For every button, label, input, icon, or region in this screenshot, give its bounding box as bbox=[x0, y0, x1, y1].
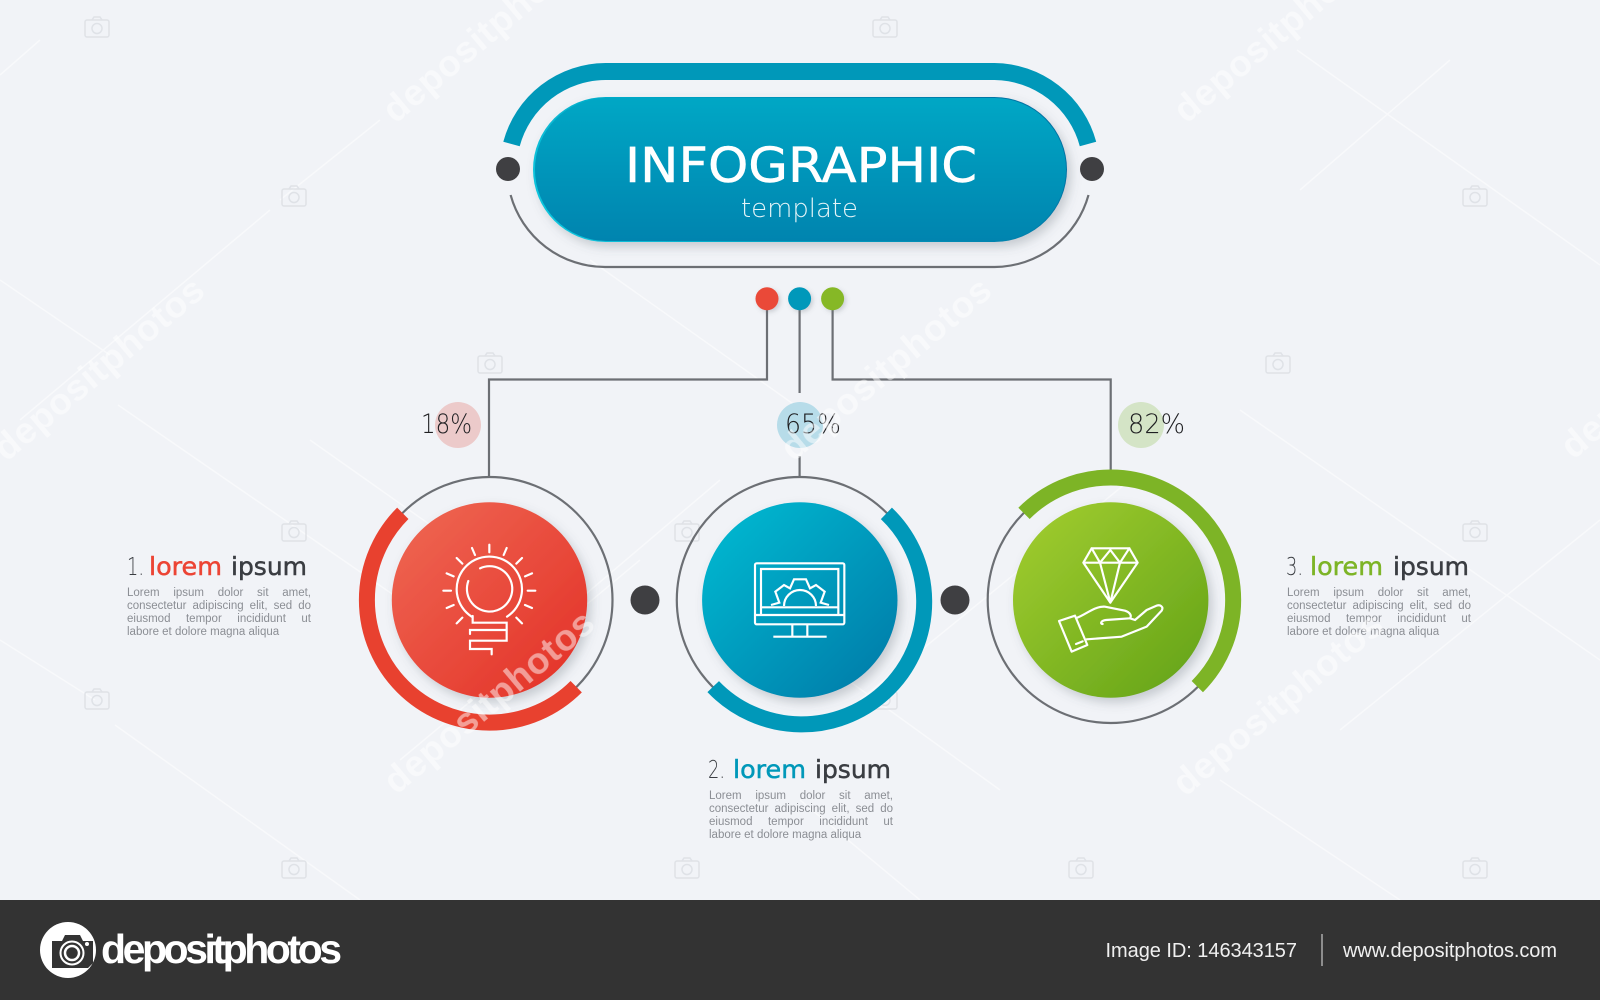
body 1: consectetur adipiscing elit, sed do bbox=[127, 600, 311, 612]
percent 82% bbox=[1118, 402, 1185, 448]
heading 2: ipsum bbox=[815, 755, 891, 784]
percent 18%: 18% bbox=[421, 409, 472, 440]
diagonal watermarks: depositphotos bbox=[772, 269, 999, 469]
title pill bbox=[533, 97, 1067, 242]
body 2: eiusmod tempor incididunt ut bbox=[709, 816, 893, 828]
icon: monitor with gear bbox=[755, 563, 844, 637]
image id: Image ID: 146343157 bbox=[1106, 940, 1297, 962]
body 2 bbox=[709, 790, 893, 844]
heading 1: 1. bbox=[127, 552, 144, 581]
panel: blue step circle bbox=[677, 477, 924, 724]
left dark dot bbox=[496, 157, 520, 181]
separator dot left bbox=[630, 586, 660, 614]
footer logo mark bbox=[40, 922, 96, 978]
body 3: labore et dolore magna aliqua bbox=[1287, 626, 1439, 638]
icon: light bulb bbox=[443, 545, 535, 654]
heading 3: 3. bbox=[1286, 552, 1303, 581]
right dark dot bbox=[1080, 157, 1104, 181]
text block 1 bbox=[127, 552, 311, 641]
body 1: eiusmod tempor incididunt ut bbox=[127, 613, 311, 625]
connector lines bbox=[489, 300, 1111, 477]
blue disc bbox=[702, 502, 898, 698]
diagonal watermarks: depositphotos bbox=[375, 602, 602, 802]
body 2: labore et dolore magna aliqua bbox=[709, 829, 861, 841]
panel: green step circle bbox=[988, 477, 1234, 723]
body 2: Lorem ipsum dolor sit amet, bbox=[709, 790, 893, 802]
connector dot: red bbox=[756, 287, 778, 310]
connector dot: blue bbox=[788, 287, 811, 310]
subtitle: template bbox=[741, 194, 858, 224]
bottom arc line bbox=[511, 195, 1089, 267]
heading 2: lorem bbox=[733, 755, 806, 784]
separator dot right bbox=[940, 586, 970, 614]
footer logo wordmark: depositphotos bbox=[101, 926, 342, 972]
footer bar bbox=[0, 900, 1600, 1000]
panel: red step circle bbox=[366, 477, 612, 723]
text block 3 bbox=[1286, 552, 1471, 641]
body 3: eiusmod tempor incididunt ut bbox=[1287, 613, 1471, 625]
heading 2: 2. bbox=[708, 755, 725, 784]
heading 1 bbox=[127, 552, 307, 581]
green progress arc bbox=[1024, 477, 1233, 687]
red disc bbox=[392, 502, 587, 698]
green disc bbox=[1013, 502, 1208, 698]
connector dot: green bbox=[821, 287, 844, 310]
heading 3: lorem bbox=[1310, 552, 1383, 581]
body 3: consectetur adipiscing elit, sed do bbox=[1287, 600, 1471, 612]
heading 1: ipsum bbox=[231, 552, 307, 581]
percent 65% bbox=[777, 402, 841, 448]
icon: diamond over hand bbox=[1059, 548, 1162, 652]
body 1: labore et dolore magna aliqua bbox=[127, 626, 279, 638]
percent 82%: 82% bbox=[1128, 409, 1185, 440]
red progress arc bbox=[367, 513, 576, 723]
percent 18% bbox=[421, 402, 481, 448]
body 1: Lorem ipsum dolor sit amet, bbox=[127, 587, 311, 599]
top arc band bbox=[512, 72, 1088, 144]
body 1 bbox=[127, 587, 311, 641]
website: www.depositphotos.com bbox=[1342, 940, 1557, 962]
body 3 bbox=[1287, 587, 1471, 641]
percent 65%: 65% bbox=[785, 409, 841, 440]
footer divider bbox=[1321, 934, 1323, 966]
title: INFOGRAPHIC bbox=[625, 138, 977, 194]
text block 2 bbox=[708, 755, 893, 844]
heading 3 bbox=[1286, 552, 1469, 581]
heading 3: ipsum bbox=[1393, 552, 1469, 581]
heading 2 bbox=[708, 755, 891, 784]
body 3: Lorem ipsum dolor sit amet, bbox=[1287, 587, 1471, 599]
blue progress arc bbox=[713, 513, 924, 724]
header pill group bbox=[496, 72, 1104, 267]
heading 1: lorem bbox=[149, 552, 222, 581]
diagonal watermarks: depositphotos bbox=[1164, 604, 1391, 804]
watermark camera marks bbox=[85, 17, 1487, 878]
body 2: consectetur adipiscing elit, sed do bbox=[709, 803, 893, 815]
